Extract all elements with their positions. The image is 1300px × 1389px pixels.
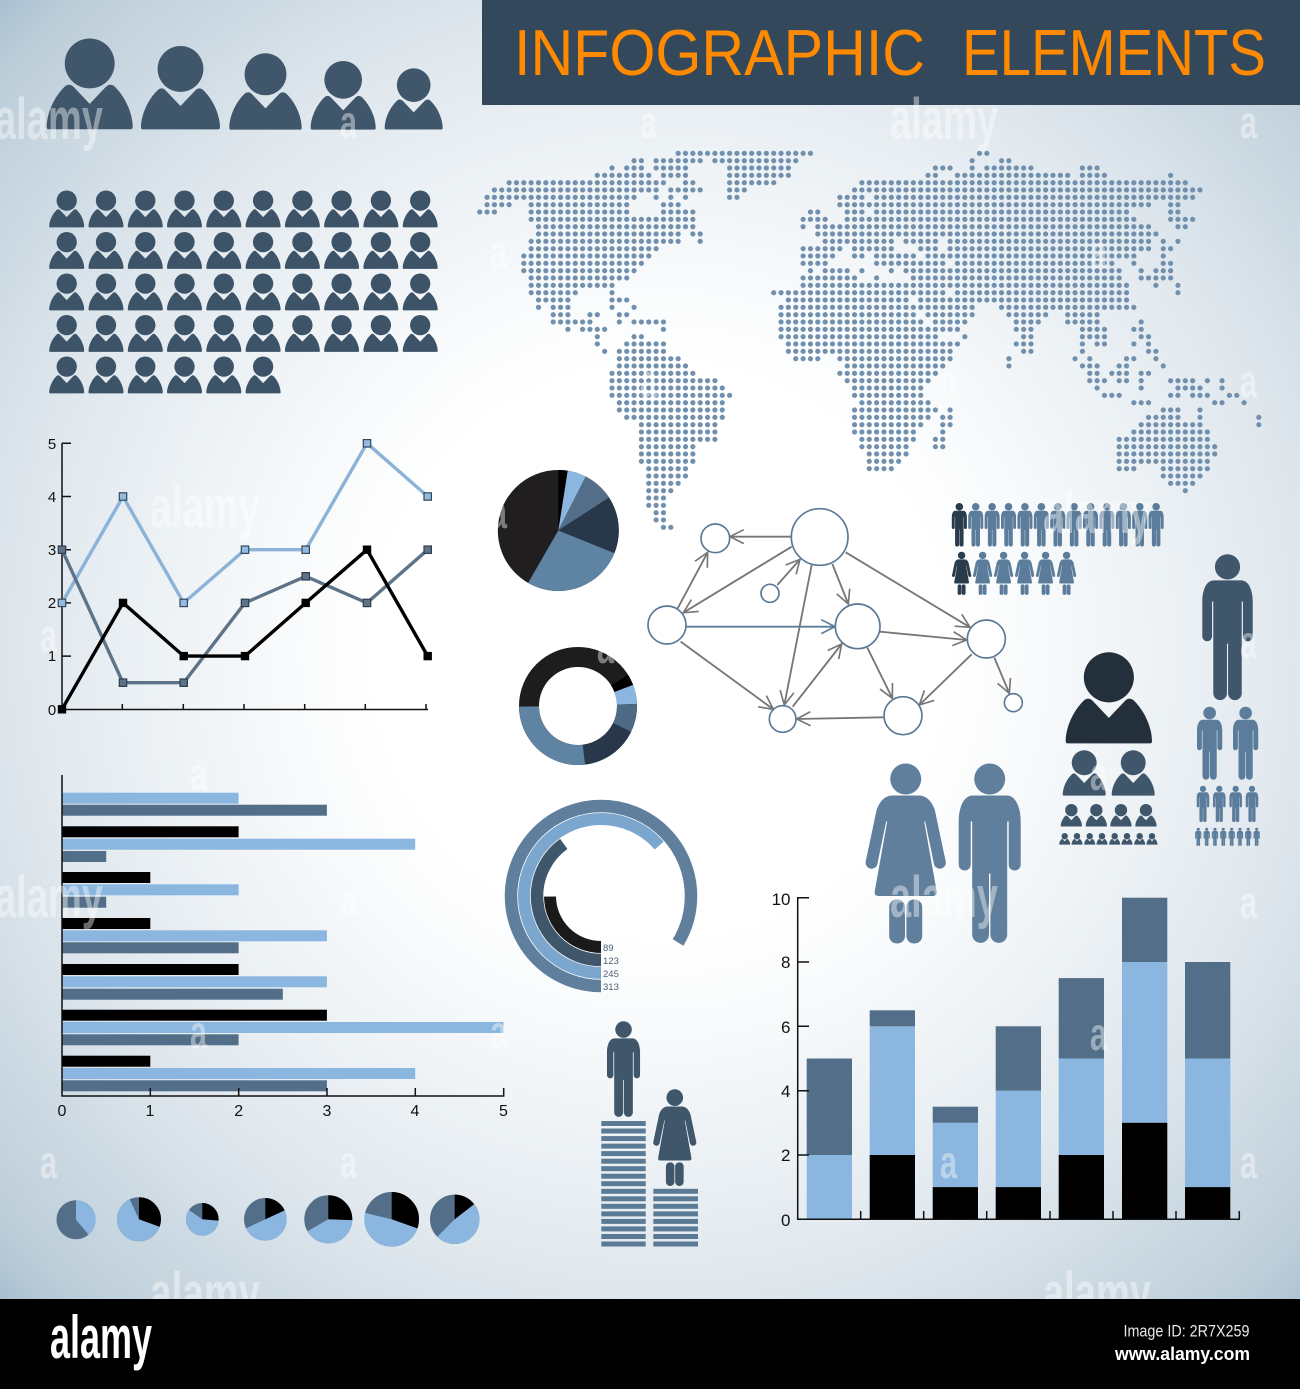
pictogram row: men xyxy=(952,503,1164,547)
line chart y-axis labels: 2 xyxy=(48,595,56,612)
bar chart x-axis labels: 2 xyxy=(234,1103,243,1120)
icon: large woman xyxy=(866,764,946,944)
stock watermarks: a xyxy=(1240,616,1257,668)
bar chart x-axis labels: 5 xyxy=(499,1103,508,1120)
hierarchy of busts xyxy=(1059,652,1158,845)
stacked chart axes xyxy=(798,898,1239,1219)
small pie 3 xyxy=(194,1211,210,1227)
stock watermarks: a xyxy=(1240,96,1257,148)
slate series xyxy=(58,546,431,686)
stock watermarks: alamy xyxy=(890,87,998,152)
woman on short stack xyxy=(653,1089,698,1246)
stacked bar chart xyxy=(772,890,1239,1230)
line chart y-axis labels: 1 xyxy=(48,648,56,665)
stock watermarks: alamy xyxy=(1043,1261,1151,1326)
stock watermarks: a xyxy=(40,1136,57,1188)
stacked chart y-axis labels: 0 xyxy=(781,1211,790,1230)
line chart y-axis labels: 3 xyxy=(48,542,56,559)
icon: large man xyxy=(959,764,1021,943)
radial ring chart xyxy=(511,806,691,993)
stock watermarks: alamy xyxy=(150,475,260,540)
slate bars xyxy=(62,805,327,1091)
man on tall stack xyxy=(601,1021,646,1246)
pie chart xyxy=(528,500,589,561)
stock watermarks: a xyxy=(640,355,657,407)
stock watermarks: a xyxy=(1090,226,1107,278)
ring values: 313 xyxy=(603,982,619,993)
light blue bars xyxy=(62,793,504,1079)
ring values xyxy=(603,943,619,993)
stock watermarks: a xyxy=(640,96,657,148)
line chart axes xyxy=(62,443,428,710)
title banner: INFOGRAPHIC xyxy=(514,16,925,89)
small pie 1 xyxy=(66,1210,86,1229)
stock watermarks: alamy xyxy=(150,1261,260,1326)
row of small pie charts xyxy=(66,1206,467,1233)
small pie 4 xyxy=(255,1209,276,1230)
network nodes xyxy=(648,509,1022,735)
stacked chart y-axis labels: 2 xyxy=(781,1146,790,1165)
ring values: 89 xyxy=(603,943,614,954)
stock watermarks: alamy xyxy=(1043,481,1151,546)
line chart y-axis labels: 0 xyxy=(48,702,56,719)
line chart y-axis labels: 5 xyxy=(48,436,56,453)
light blue series xyxy=(58,440,431,607)
dotted world map xyxy=(480,153,1259,527)
network diagram xyxy=(648,509,1022,735)
stock watermarks: a xyxy=(1240,1136,1257,1188)
ring values: 123 xyxy=(603,956,619,967)
stock watermarks: a xyxy=(490,1006,507,1058)
bar chart x-axis labels: 0 xyxy=(58,1103,67,1120)
small pie 5 xyxy=(316,1207,340,1231)
black bars xyxy=(62,826,327,1067)
pictogram grid of person busts xyxy=(49,190,438,393)
hierarchy of men xyxy=(1195,554,1260,846)
horizontal bar chart xyxy=(58,775,508,1120)
stacked chart y-axis labels xyxy=(772,890,790,1230)
footer url: www.alamy.com xyxy=(1114,1344,1250,1364)
footer bar xyxy=(0,1299,1300,1389)
stacked chart y-axis labels: 6 xyxy=(781,1018,790,1037)
footer logo: alamy xyxy=(50,1304,152,1371)
footer image id: Image ID: 2R7X259 xyxy=(1124,1322,1250,1340)
small pie 7 xyxy=(442,1207,467,1232)
stock watermarks: a xyxy=(340,96,357,148)
bar chart x-axis labels: 1 xyxy=(146,1103,155,1120)
stacked chart y-axis labels: 8 xyxy=(781,953,790,972)
stock watermarks: a xyxy=(340,874,357,926)
icons: five large person busts xyxy=(47,38,443,130)
black segments xyxy=(870,1123,1230,1219)
stock watermarks: a xyxy=(1090,748,1107,800)
stock watermarks: a xyxy=(490,226,507,278)
black series xyxy=(58,546,431,713)
stock watermarks: a xyxy=(1090,1008,1107,1060)
line chart xyxy=(48,436,431,719)
donut chart xyxy=(529,657,627,755)
stock watermarks: a xyxy=(490,486,507,538)
pictogram row: women xyxy=(952,552,1076,595)
bar chart x-axis labels: 4 xyxy=(411,1103,420,1120)
bar chart x-axis labels xyxy=(58,1103,508,1120)
stock watermarks: a xyxy=(190,748,207,800)
stock watermarks: a xyxy=(40,610,57,662)
stock watermarks: a xyxy=(597,621,614,673)
network arrows xyxy=(678,537,1009,719)
bar chart x-axis labels: 3 xyxy=(323,1103,332,1120)
stacked chart y-axis labels: 4 xyxy=(781,1082,790,1101)
line chart y-axis labels xyxy=(48,436,56,719)
small pie 2 xyxy=(128,1208,150,1230)
stock watermarks: alamy xyxy=(890,865,998,930)
stock watermarks: a xyxy=(1240,355,1257,407)
bar chart axes xyxy=(62,775,504,1096)
line chart y-axis labels: 4 xyxy=(48,489,56,506)
small pie 6 xyxy=(378,1206,405,1233)
stacked chart y-axis labels: 10 xyxy=(772,890,790,909)
light blue segments xyxy=(807,962,1230,1219)
stock watermarks: a xyxy=(1240,876,1257,928)
title banner xyxy=(482,0,1300,105)
stock watermarks: a xyxy=(190,1006,207,1058)
slate segments xyxy=(807,898,1230,1155)
stock watermarks: a xyxy=(940,1136,957,1188)
stock watermarks: a xyxy=(940,355,957,407)
ring values: 245 xyxy=(603,969,619,980)
stock watermarks: a xyxy=(340,1136,357,1188)
